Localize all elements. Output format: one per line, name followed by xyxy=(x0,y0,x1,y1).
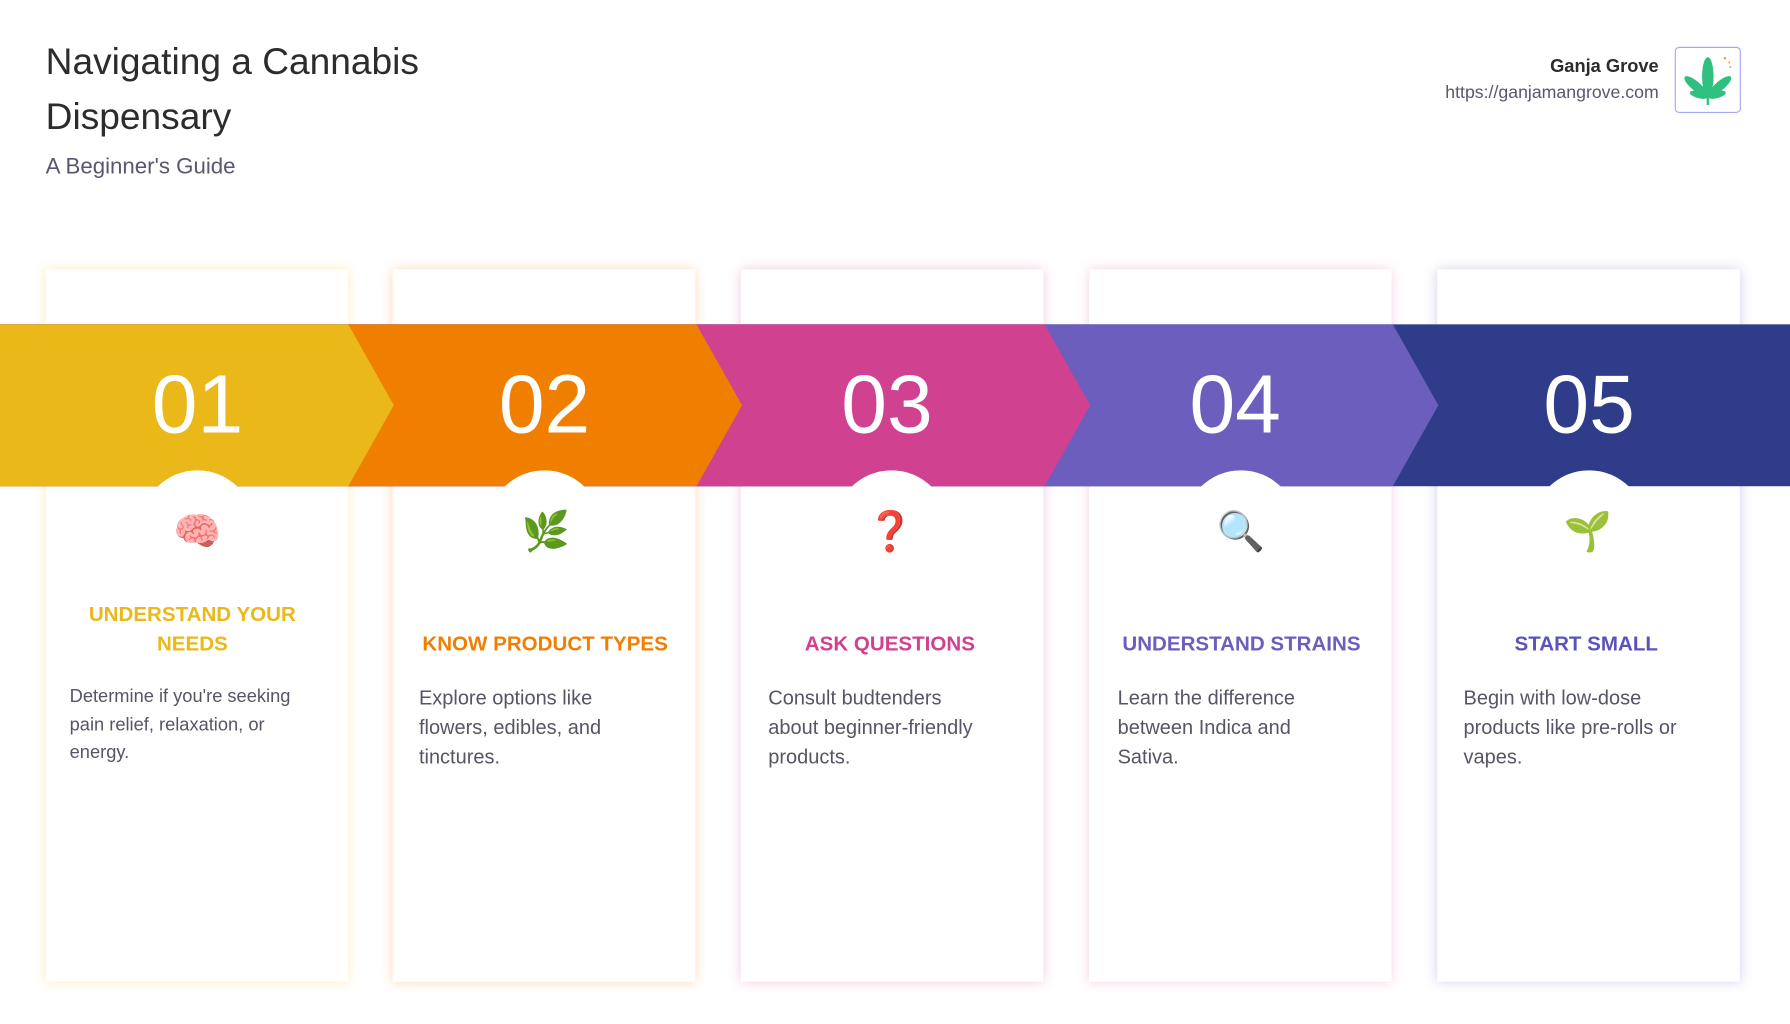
number 02: 02 xyxy=(499,360,590,451)
title: Navigating a Cannabis xyxy=(46,41,419,82)
icon: brain: 🧠 xyxy=(173,509,222,555)
body 5: Begin with low-dose products like pre-rolls or vapes. xyxy=(1464,686,1677,768)
body 2: Explore options like flowers, edibles, and tinctures. xyxy=(419,686,601,768)
heading 1: NEEDS xyxy=(157,632,228,655)
body 3: Consult budtenders about beginner-friendly products. xyxy=(768,686,973,768)
title: Dispensary xyxy=(46,96,231,137)
heading 1: UNDERSTAND YOUR xyxy=(89,603,296,626)
brand text: https://ganjamangrove.com xyxy=(1445,83,1659,103)
card 4 xyxy=(1089,269,1392,982)
title xyxy=(46,41,419,137)
icon: herb: 🌿 xyxy=(522,509,570,555)
card 1 xyxy=(46,269,348,982)
card 3 xyxy=(741,269,1043,982)
card 2 xyxy=(393,269,695,982)
heading 5: START SMALL xyxy=(1515,632,1658,655)
arrow band xyxy=(0,324,1790,486)
number 04: 04 xyxy=(1189,360,1281,451)
subtitle: A Beginner's Guide xyxy=(46,154,236,179)
card 5 xyxy=(1437,269,1740,982)
heading 3: ASK QUESTIONS xyxy=(805,632,975,655)
heading 2: KNOW PRODUCT TYPES xyxy=(422,632,668,655)
body 4: Learn the difference between Indica and Sativa. xyxy=(1118,686,1295,768)
heading 1 xyxy=(89,603,296,655)
body 1: Determine if you're seeking pain relief, relaxation, or energy. xyxy=(70,687,290,763)
icon: magnifier: 🔍 xyxy=(1217,509,1265,555)
brand text: Ganja Grove xyxy=(1550,57,1659,76)
number 03: 03 xyxy=(841,360,933,451)
icon: question: ❓ xyxy=(866,509,915,555)
heading 4: UNDERSTAND STRAINS xyxy=(1122,632,1361,655)
icon: logo xyxy=(1675,47,1741,113)
icon: seedling: 🌱 xyxy=(1564,509,1612,555)
brand text xyxy=(1445,57,1659,103)
number 01: 01 xyxy=(152,360,243,451)
number 05: 05 xyxy=(1543,360,1635,451)
